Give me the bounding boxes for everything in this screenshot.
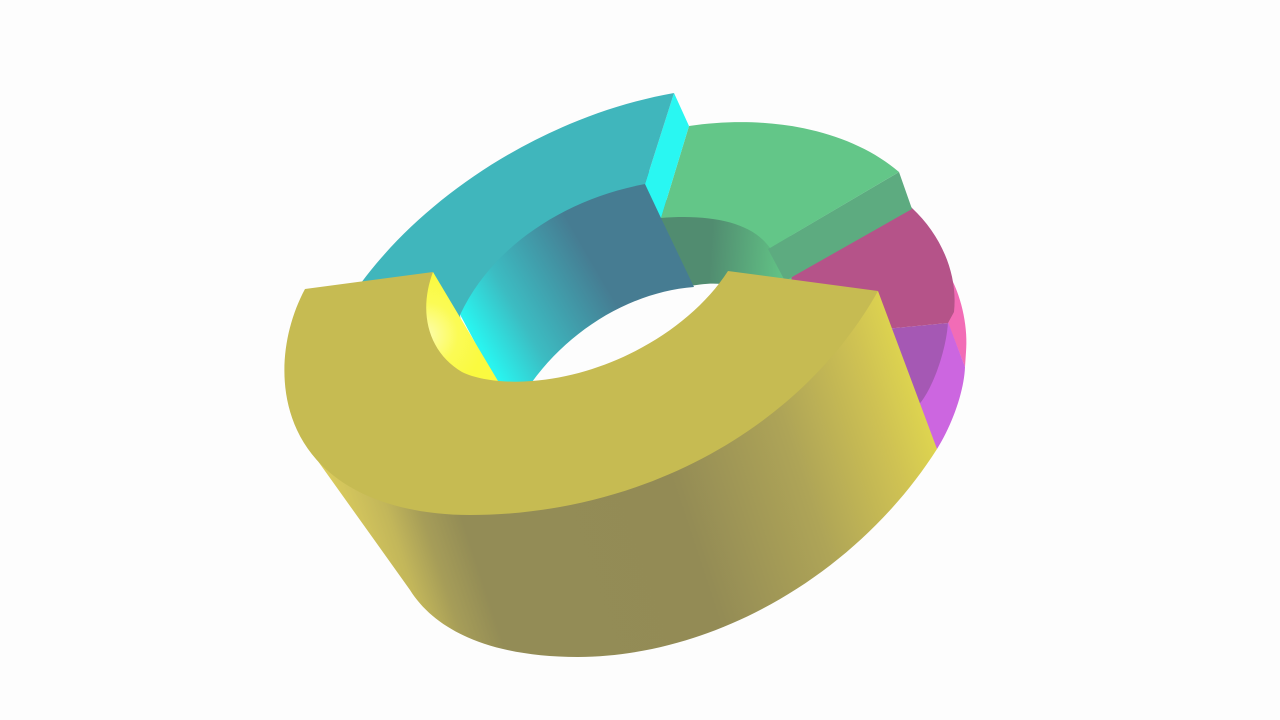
slice: green top	[661, 122, 899, 248]
slice: purple top	[885, 323, 948, 420]
slice: yellow inner wall	[415, 272, 500, 395]
slice: yellow side	[310, 291, 937, 657]
slice: green side	[768, 172, 912, 281]
slice: magenta side	[915, 322, 965, 449]
slice: pink side	[940, 276, 966, 367]
slice: teal inner wall	[455, 170, 694, 382]
slice: cyan end	[645, 93, 689, 218]
slice: teal top	[361, 93, 674, 400]
slice: yellow top	[284, 271, 878, 515]
slice: magenta top	[780, 200, 955, 329]
slice: green inner wall	[650, 190, 792, 290]
